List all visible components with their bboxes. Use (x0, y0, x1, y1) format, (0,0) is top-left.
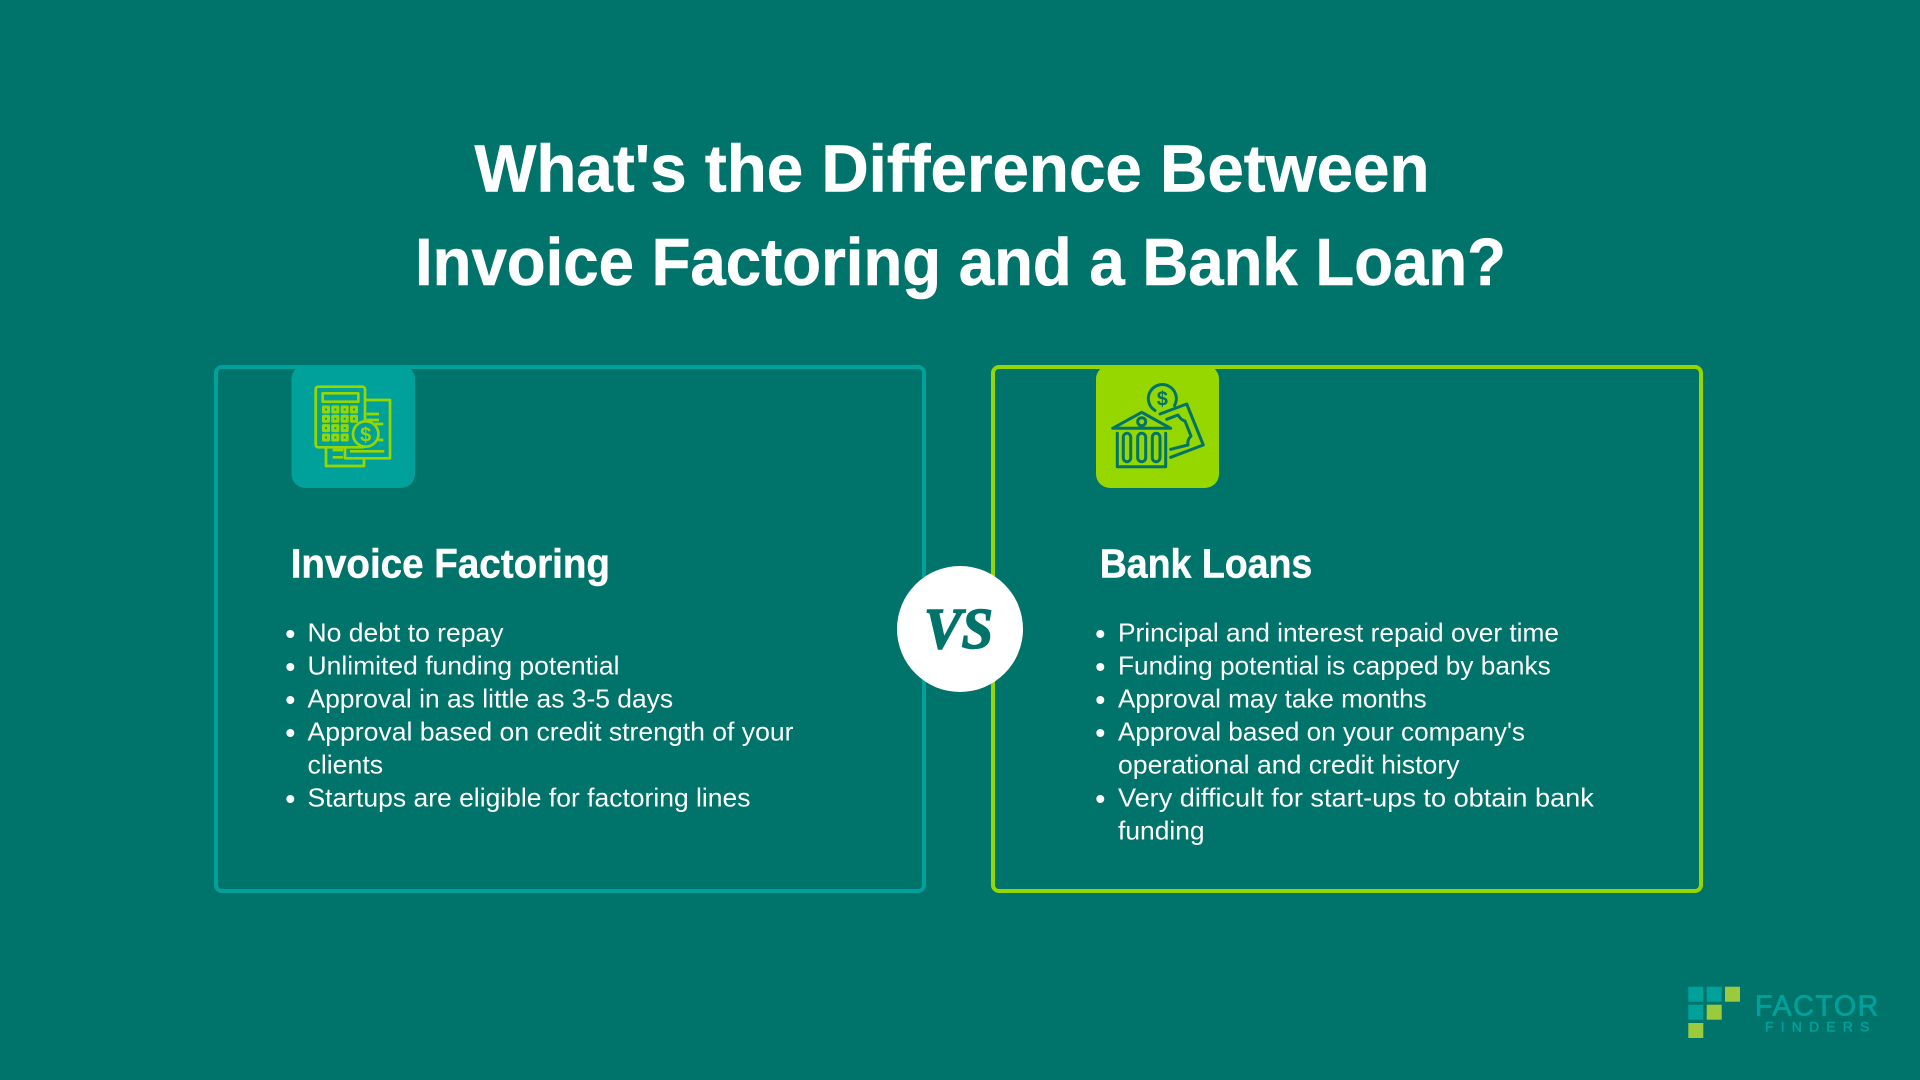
list: invoice factoring benefits: Unlimited funding potential (308, 653, 620, 681)
list: invoice factoring benefits (286, 620, 794, 813)
heading: invoice factoring: Invoice Factoring (291, 540, 610, 586)
list: invoice factoring benefits: Approval in as little as 3-5 days (308, 686, 673, 714)
title (415, 133, 1506, 300)
icon: bank and money (1096, 365, 1219, 488)
VS badge: VS (924, 596, 993, 661)
title: What's the Difference Between (474, 133, 1430, 207)
logo: Factor Finders: FINDERS (1765, 1019, 1869, 1035)
panel: invoice factoring (216, 365, 924, 891)
list: bank loan characteristics (1096, 620, 1594, 846)
list: bank loan characteristics: operational and credit history (1118, 752, 1460, 780)
heading: bank loans: Bank Loans (1100, 540, 1312, 586)
list: invoice factoring benefits: No debt to repay (308, 620, 504, 648)
list: invoice factoring benefits: Startups are eligible for factoring lines (308, 785, 750, 813)
list: invoice factoring benefits: clients (308, 752, 383, 780)
title: Invoice Factoring and a Bank Loan? (415, 226, 1506, 300)
panel: bank loans (993, 365, 1701, 891)
list: bank loan characteristics: Principal and interest repaid over time (1118, 620, 1559, 648)
list: bank loan characteristics: Approval may take months (1118, 686, 1427, 714)
list: bank loan characteristics: Approval based on your company's (1118, 719, 1525, 747)
list: bank loan characteristics: Funding potential is capped by banks (1118, 653, 1551, 681)
icon: bank and money: $ (1157, 388, 1168, 410)
icon: calculator and invoice (292, 365, 415, 488)
VS badge (897, 566, 1023, 692)
logo: Factor Finders: FACTOR (1755, 991, 1878, 1023)
list: invoice factoring benefits: Approval based on credit strength of your (308, 719, 794, 747)
list: bank loan characteristics: funding (1118, 818, 1205, 846)
icon: calculator and invoice: $ (360, 424, 371, 446)
list: bank loan characteristics: Very difficult for start-ups to obtain bank (1118, 785, 1594, 813)
logo: Factor Finders (1688, 987, 1878, 1038)
